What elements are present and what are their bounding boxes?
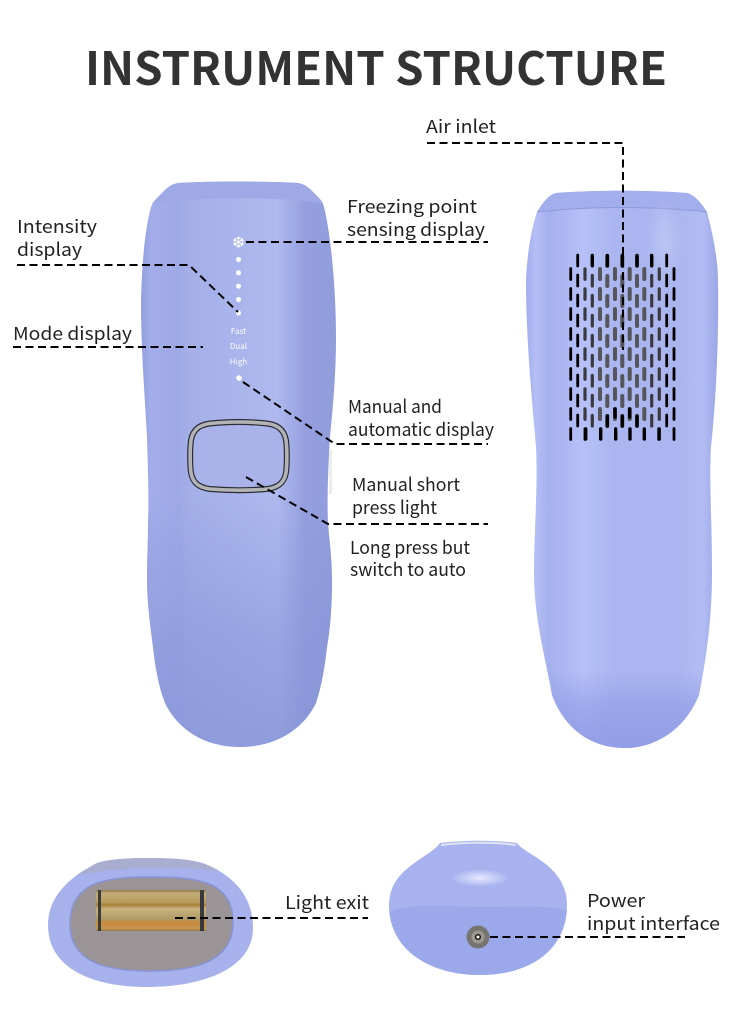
title: INSTRUMENT STRUCTURE — [85, 33, 667, 99]
label: freezing point sensing display — [347, 193, 486, 242]
callout lines — [13, 143, 685, 937]
label: intensity display: display — [17, 236, 83, 262]
device: head end with light exit — [48, 858, 253, 987]
label: intensity display — [17, 213, 98, 262]
label: manual and automatic display: automatic display — [348, 416, 495, 442]
device: back view — [526, 191, 718, 748]
mode labels — [230, 326, 247, 368]
label: freezing point sensing display: sensing display — [347, 216, 486, 242]
mode labels: Dual — [230, 341, 247, 352]
label: mode display: Mode display — [13, 320, 133, 346]
label: manual short press light: press light — [352, 494, 437, 520]
side switch — [329, 450, 332, 494]
indicator dot: manual and automatic — [236, 375, 242, 381]
label: manual and automatic display — [348, 393, 495, 442]
label: intensity display: Intensity — [17, 213, 98, 239]
label: power input interface — [587, 887, 720, 936]
gold lamp window — [96, 890, 206, 931]
label: light exit: Light exit — [285, 889, 369, 915]
device: base end with power port — [385, 841, 570, 980]
intensity indicator dots — [236, 257, 241, 316]
power button — [190, 422, 287, 490]
mode labels: High — [230, 356, 247, 368]
label: manual short press light — [352, 471, 460, 520]
label: long press switch to auto — [350, 534, 470, 582]
grey aperture plate — [70, 877, 233, 971]
label: manual and automatic display: Manual and — [348, 393, 442, 419]
label: power input interface: Power — [587, 887, 646, 913]
power input port — [466, 926, 490, 948]
mode labels: Fast — [231, 326, 246, 337]
label: freezing point sensing display: Freezing point — [347, 193, 477, 219]
label: long press switch to auto: Long press but — [350, 534, 470, 560]
label: power input interface: input interface — [587, 910, 720, 936]
device: front view — [141, 182, 336, 747]
label: air inlet: Air inlet — [426, 113, 496, 139]
air inlet vent slots — [571, 255, 674, 441]
icon: snowflake: ❆ — [232, 234, 245, 252]
label: manual short press light: Manual short — [352, 471, 460, 497]
label: long press switch to auto: switch to auto — [350, 556, 466, 582]
